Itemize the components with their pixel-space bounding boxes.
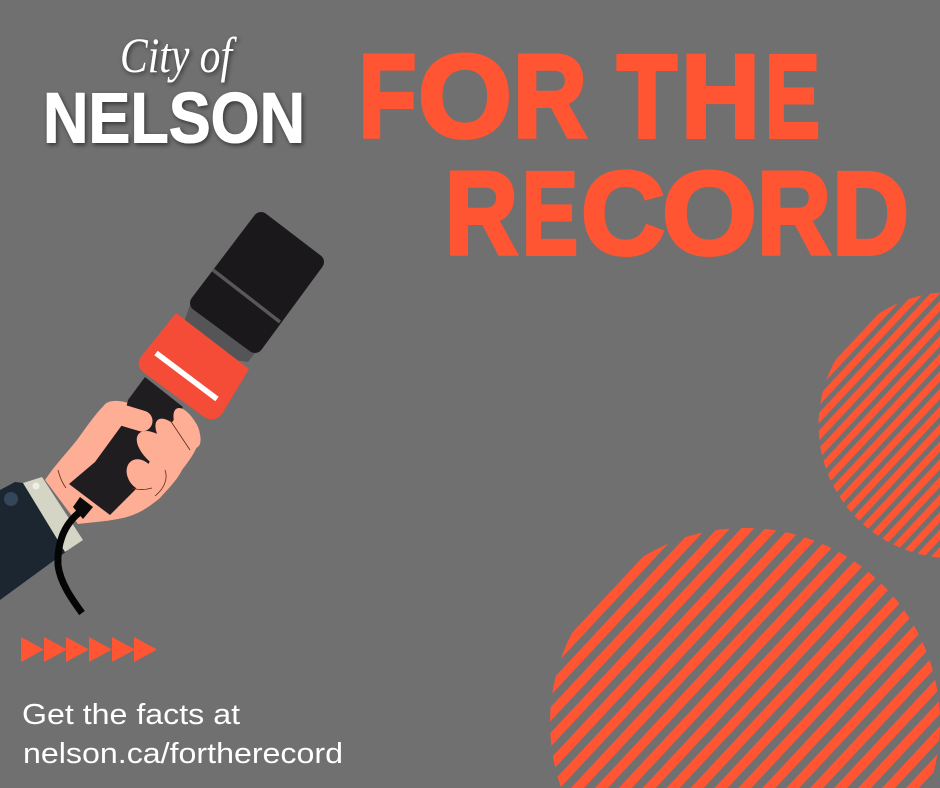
title line 1: F (358, 31, 416, 163)
title line 2: R (757, 148, 831, 280)
arrows row (21, 637, 157, 662)
title: For the Record (358, 31, 909, 280)
shirt cuff (23, 477, 83, 552)
title line 2: E (522, 148, 578, 280)
title line 1: O (418, 31, 512, 163)
microphone head band (213, 270, 280, 322)
microphone handle (69, 377, 183, 515)
cuff button (32, 482, 40, 490)
title line 2: R (445, 148, 518, 280)
arrow 6 (134, 637, 157, 662)
jacket button (4, 492, 18, 506)
illustration: hand holding microphone (0, 220, 316, 613)
line 2: nelson.ca/fortherecord (23, 738, 343, 770)
little finger (121, 454, 161, 496)
call to action text (22, 699, 343, 770)
arrow 3 (66, 637, 89, 662)
middle finger (149, 413, 195, 463)
finger creases (58, 420, 190, 496)
title line 1: T (617, 31, 677, 163)
ring finger (130, 423, 190, 481)
white bar (156, 353, 217, 399)
title line 2: O (662, 148, 757, 280)
fingers (58, 404, 206, 496)
title line 1: E (765, 31, 820, 163)
title line 2: C (581, 148, 665, 280)
microphone neck (184, 305, 255, 362)
striped circle: bottom (550, 528, 940, 788)
jacket sleeve (0, 482, 67, 600)
index finger (168, 404, 206, 452)
hand (45, 401, 200, 524)
arrow 1 (21, 637, 44, 662)
arrow 4 (89, 637, 112, 662)
arrow 2 (44, 637, 67, 662)
logo script: City of: City of (120, 27, 237, 83)
title line 1: H (681, 31, 760, 163)
arrow 5 (112, 637, 135, 662)
cable (58, 512, 82, 613)
logo wordmark: NELSON: NELSON (43, 80, 305, 158)
line 1: Get the facts at (22, 699, 240, 731)
red collar (139, 313, 249, 419)
title line 2: D (832, 148, 909, 280)
thumb (112, 412, 142, 421)
logo: City of Nelson (43, 27, 305, 158)
microphone head (198, 220, 316, 345)
cable plug (73, 497, 93, 519)
title line 1: R (513, 31, 587, 163)
striped circle: right (819, 292, 940, 558)
